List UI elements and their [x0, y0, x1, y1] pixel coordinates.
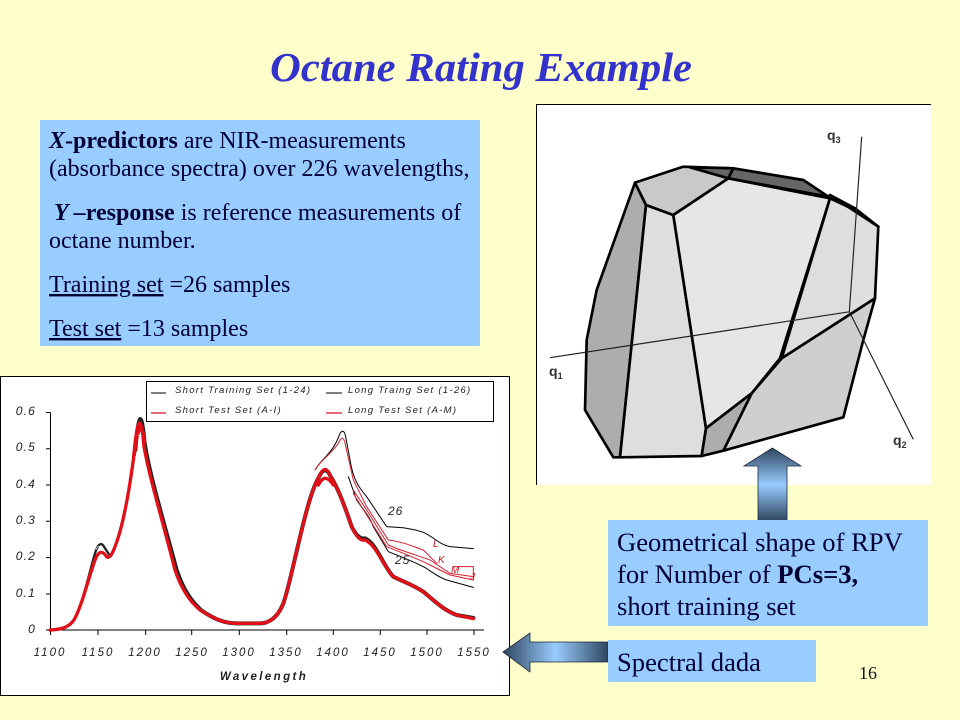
x axis labels: 1400 [316, 647, 350, 659]
page number: 16 [859, 663, 877, 683]
panel: spectral caption [608, 640, 816, 682]
panel: predictors and response description: octane number. [49, 228, 196, 254]
x axis labels: 1100 [34, 647, 66, 659]
panel: predictors and response description [40, 120, 480, 346]
arrow: up to shape figure [744, 448, 801, 521]
x axis labels: 1550 [457, 647, 491, 659]
panel: predictors and response description: (absorbance spectra) over 226 wavelengths, [49, 156, 470, 182]
main spectra band [50, 419, 473, 630]
legend: Short Training Set (1-24) [175, 385, 311, 396]
y axis labels: 0.4 [16, 477, 36, 491]
coordinate axes [550, 137, 913, 439]
y axis labels: 0.2 [16, 549, 36, 563]
panel: shape caption: short training set [617, 591, 796, 621]
legend [146, 382, 494, 422]
arrow: left to spectral chart [503, 633, 608, 672]
axis labels: q [893, 432, 902, 448]
axis labels: 3 [836, 135, 841, 145]
y axis labels: 0.3 [16, 513, 36, 527]
panel: spectral caption: Spectral dada [617, 647, 761, 677]
panel: spectral chart: K [438, 555, 446, 566]
panel: shape caption [608, 520, 928, 626]
y axis labels: 0.6 [16, 404, 36, 418]
polyhedron faces [585, 167, 878, 457]
x axis labels: 1250 [175, 647, 209, 659]
chart axes [46, 412, 484, 635]
axis labels: 1 [558, 371, 563, 381]
panel: shape caption: for Number of PCs=3, [617, 559, 858, 589]
panel: RPV geometric shape figure [536, 104, 931, 485]
y axis labels: 0.1 [16, 586, 36, 600]
title: Octane Rating Example [270, 44, 692, 90]
curve labels: 26 [387, 504, 403, 518]
x axis labels: 1150 [82, 647, 114, 659]
x axis labels: 1300 [222, 647, 256, 659]
panel: spectral chart: J [469, 572, 476, 583]
panel: predictors and response description: X-predictors are NIR-measurements [48, 128, 406, 154]
panel: predictors and response description: Training set =26 samples [49, 272, 290, 298]
legend: Long Traing Set (1-26) [348, 385, 471, 396]
curve labels: 25 [394, 553, 410, 567]
curve labels [387, 504, 410, 567]
x axis title: Wavelength [220, 671, 308, 683]
y axis labels: 0 [28, 622, 36, 636]
y axis labels [16, 404, 36, 636]
panel: spectral chart: M [451, 565, 460, 576]
axis labels: q [827, 127, 836, 143]
x axis labels: 1450 [363, 647, 397, 659]
axis labels: q [549, 363, 558, 379]
legend: Long Test Set (A-M) [348, 405, 457, 416]
axis labels: 2 [902, 440, 907, 450]
panel: spectral chart [0, 376, 510, 696]
panel: spectral chart: L [433, 539, 439, 550]
long spectra lines [315, 431, 473, 587]
panel: predictors and response description: Y –response is reference measurements of [54, 200, 461, 226]
panel: predictors and response description: Test set =13 samples [49, 316, 248, 342]
axis labels [549, 127, 907, 450]
legend: Short Test Set (A-I) [175, 405, 282, 416]
panel: shape caption: Geometrical shape of RPV [617, 527, 903, 557]
x axis labels: 1500 [410, 647, 444, 659]
y axis labels: 0.5 [16, 440, 36, 454]
x axis labels: 1350 [269, 647, 303, 659]
x axis labels [34, 647, 491, 659]
x axis labels: 1200 [128, 647, 162, 659]
